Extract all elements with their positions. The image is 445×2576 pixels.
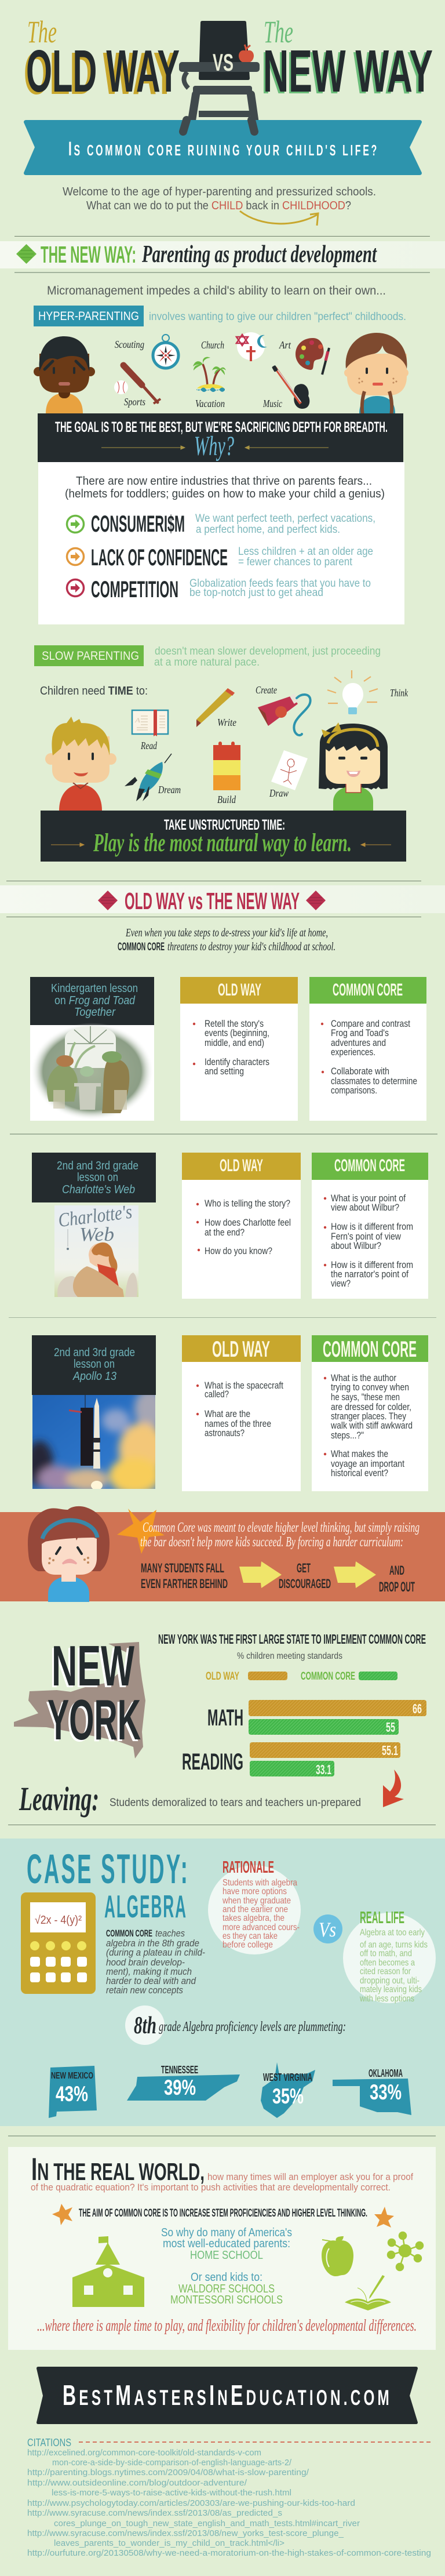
- label: write: Write: [217, 717, 236, 728]
- icon: star left: [52, 2204, 72, 2225]
- illustration: blond boy: [45, 717, 116, 811]
- icon: compass: [153, 335, 178, 368]
- icon: rocket: [125, 754, 172, 801]
- panel: kindergarten lesson: Kindergarten lesson: [51, 982, 138, 995]
- text: even when: COMMON CORE: [118, 941, 165, 953]
- panel: kindergarten lesson: Together: [74, 1006, 116, 1019]
- text: so why: Or send kids to:: [191, 2271, 262, 2284]
- panel: take unstructured time: [41, 811, 406, 862]
- illustration: boy with dark skin: [34, 336, 95, 413]
- step: many students: EVEN FARTHER BEHIND: [141, 1576, 228, 1591]
- panel: common core charlotte's web: Fern's point of view: [331, 1231, 401, 1242]
- icon: apple: [239, 45, 254, 62]
- state: new mexico: [49, 2066, 97, 2118]
- intro text: What can we do to put the CHILD back in CHILDHOOD?: [86, 199, 351, 212]
- panel: common core apollo: historical event?: [331, 1468, 388, 1478]
- text: industries: There are now entire industries that thrive on parents fears...: [76, 475, 372, 488]
- reason: competition: Globalization feeds fears that you have to: [189, 577, 371, 590]
- icon: calculator: √2x - 4(y)²: [35, 1914, 82, 1927]
- callout: real life: Algebra at too early: [360, 1928, 425, 1938]
- citations: [27, 2437, 431, 2558]
- panel: case study algebra: ALGEBRA: [104, 1888, 187, 1924]
- step: get discouraged: GET: [297, 1561, 311, 1575]
- callout: rationale: more advanced cours-: [222, 1923, 300, 1932]
- panel: old way charlotte's web: How does Charlotte feel: [205, 1218, 291, 1228]
- callout: rationale: es they can take: [222, 1931, 278, 1941]
- citations: CITATIONS: [27, 2437, 71, 2448]
- step: drop out: AND: [389, 1563, 404, 1578]
- reading bars: [182, 1742, 400, 1777]
- label: york: YORK: [46, 1690, 138, 1753]
- banner: bestmastersineducation: [37, 2367, 418, 2424]
- icon: paint tube: [258, 693, 311, 735]
- panel: common core kindergarten: adventures and: [331, 1038, 386, 1048]
- panel: old way kindergarten: and setting: [205, 1066, 244, 1077]
- panel: case study algebra: [0, 1839, 445, 2126]
- panel: common core apollo: steps...?": [331, 1430, 364, 1441]
- math bars: 66: [413, 1701, 422, 1716]
- reading bars: 55.1: [382, 1743, 398, 1758]
- text: micromanagement: Micromanagement impedes a child's ability to learn on their own...: [47, 284, 386, 297]
- citations: leaves_parents_to_wonder_is_my_child_on_track.html</li>: [54, 2538, 284, 2548]
- panel: charlotte's web lesson: lesson on: [77, 1171, 118, 1184]
- text: quadratic equation: of the quadratic equation? It's important to push activities that are developmentally correct.: [31, 2182, 391, 2193]
- arrows toward why: [101, 446, 329, 449]
- panel: old way charlotte's web: OLD WAY: [220, 1156, 263, 1175]
- intro text: Welcome to the age of hyper-parenting and pressurized schools.: [63, 186, 376, 198]
- callout: rationale: and the earlier one: [222, 1905, 288, 1914]
- panel: old way apollo: astronauts?: [205, 1428, 245, 1438]
- bar chart: new york results: [158, 1632, 426, 1777]
- state: west virginia: 35%: [272, 2084, 304, 2108]
- icon: school desk chair: [179, 21, 260, 132]
- reading bars: 33.1: [316, 1762, 331, 1777]
- panel: common core kindergarten: Collaborate with: [331, 1066, 389, 1077]
- label: dream: Dream: [158, 784, 181, 795]
- banner: subtitle: [24, 120, 422, 175]
- text: common core teaches: harder to deal with and: [106, 1976, 196, 1986]
- panel: apollo 13 lesson: Apollo 13: [72, 1370, 116, 1383]
- image: book cover: [54, 1201, 138, 1297]
- new york heading with map: [14, 1634, 145, 1758]
- math bars: MATH: [207, 1705, 243, 1731]
- text: common core teaches: [106, 1928, 205, 1996]
- text: leaving: [19, 1780, 361, 1818]
- panel: old way apollo: What are the: [205, 1409, 250, 1419]
- label: new: NEW: [52, 1634, 134, 1698]
- panel: old way kindergarten: Identify characters: [205, 1057, 269, 1067]
- panel: common core apollo: stranger places. They: [331, 1411, 407, 1422]
- reason: consumerism: We want perfect teeth, perfect vacations,: [195, 513, 375, 525]
- panel: old way kindergarten: Retell the story's: [205, 1019, 264, 1029]
- vs label: VS: [213, 49, 234, 76]
- heading: case study: CASE STUDY:: [27, 1847, 189, 1892]
- text: common core teaches: ment), making it much: [106, 1967, 192, 1977]
- state: tennessee: 39%: [164, 2076, 196, 2099]
- panel: old way apollo: called?: [205, 1389, 229, 1400]
- panel: kindergarten lesson: on Frog and Toad: [54, 994, 136, 1007]
- legend: OLD WAY: [206, 1670, 239, 1683]
- panel: old way kindergarten: events (beginning,: [205, 1028, 269, 1038]
- callout: hyper-parenting: HYPER-PARENTING: [38, 310, 139, 323]
- state: new mexico: NEW MEXICO: [51, 2071, 93, 2081]
- callout: real life: dropping out, ulti-: [360, 1976, 420, 1986]
- text: so why: [161, 2226, 292, 2306]
- panel: common core apollo: trying to convey when: [331, 1382, 409, 1393]
- callout: real life: mately leaving kids: [360, 1985, 422, 1994]
- panel: common core apollo: are dressed for colder,: [331, 1402, 411, 1412]
- title: the old way: [24, 14, 180, 107]
- callout: real life: with less options: [359, 1994, 414, 2004]
- reason: lack of confidence: = fewer chances to parent: [238, 556, 353, 568]
- panel: common core charlotte's web: How is it different from: [331, 1222, 413, 1232]
- label: music: Music: [262, 398, 282, 409]
- callout: rationale: have more options: [222, 1887, 287, 1896]
- callout: rationale: [208, 1858, 301, 1954]
- panel: reasons: [38, 462, 404, 624]
- illustration: sad girl: [28, 1506, 110, 1602]
- label: draw: Draw: [269, 787, 289, 799]
- panel: charlotte's web lesson: [32, 1153, 156, 1297]
- panel: common core kindergarten: experiences.: [331, 1047, 375, 1058]
- state: new mexico: 43%: [56, 2082, 88, 2106]
- panel: old way charlotte's web: How do you know?: [205, 1246, 272, 1256]
- panel: old way apollo: What is the spacecraft: [205, 1380, 283, 1391]
- state: west virginia: [261, 2062, 315, 2118]
- label: new: NEW: [50, 1636, 132, 1699]
- callout: hyper-parenting: involves wanting to give our children "perfect" childhoods.: [149, 311, 406, 323]
- citations: http://www.syracuse.com/news/index.ssf/2013/08/new_yorks_test-score_plunge_: [27, 2528, 344, 2538]
- icon: calculator: [21, 1892, 96, 1994]
- label: vacation: Vacation: [195, 398, 225, 409]
- citations: mon-core-a-side-by-side-comparison-of-english-language-arts-2/: [52, 2458, 292, 2468]
- illustration: girl with bow: [319, 722, 388, 811]
- panel: common core kindergarten: Frog and Toad's: [331, 1028, 389, 1038]
- illustration: girl with pigtails: [344, 333, 408, 418]
- bar chart: new york results: % children meeting standards: [237, 1651, 342, 1661]
- panel: common core apollo: What makes the: [331, 1449, 388, 1459]
- panel: common core kindergarten: Compare and contrast: [331, 1019, 410, 1029]
- panel: common core apollo: voyage an important: [331, 1459, 404, 1469]
- icon: star right: [374, 2207, 394, 2228]
- panel: common core apollo: he says, "these men: [331, 1392, 400, 1403]
- panel: harder curriculum: [0, 1506, 445, 1602]
- legend: [206, 1670, 397, 1683]
- panel: old way charlotte's web: [182, 1153, 301, 1299]
- panel: apollo 13 lesson: lesson on: [74, 1358, 115, 1371]
- state: oklahoma: 33%: [370, 2080, 402, 2104]
- panel: old way charlotte's web: Who is telling the story?: [205, 1198, 290, 1209]
- illustration: frog and toad: [30, 1023, 154, 1121]
- step: get discouraged: DISCOURAGED: [279, 1576, 331, 1591]
- citations: http://www.outsideonline.com/blog/outdoor-adventure/: [27, 2478, 247, 2488]
- citations: http://parenting.blogs.nytimes.com/2009/04/08/what-is-slow-parenting/: [27, 2468, 309, 2477]
- state: tennessee: TENNESSEE: [161, 2064, 198, 2076]
- text: common core teaches: retain new concepts: [106, 1985, 183, 1996]
- step: get discouraged: [279, 1561, 331, 1591]
- citations: http://excelined.org/common-core-toolkit/old-standards-v-com: [27, 2448, 261, 2458]
- title: the old way: OLD WAY: [24, 40, 176, 107]
- panel: in the real world: [8, 2147, 436, 2350]
- panel: common core charlotte's web: the narrator's point of: [331, 1269, 408, 1280]
- title: the old way: OLD WAY: [26, 38, 180, 104]
- label: create: Create: [256, 684, 277, 696]
- text: leaving: Students demoralized to tears and teachers un-prepared: [110, 1797, 361, 1809]
- callout: rationale: takes algebra, the: [222, 1913, 284, 1923]
- panel: common core kindergarten: [309, 977, 426, 1121]
- panel: old way kindergarten: [180, 977, 298, 1121]
- text: even when: [118, 927, 335, 953]
- text: industries: [65, 475, 385, 500]
- citations: http://www.psychologytoday.com/articles/200303/are-we-pushing-our-kids-too-hard: [27, 2498, 355, 2508]
- icon: religious symbols: [236, 332, 267, 361]
- panel: goal and why: [38, 413, 403, 462]
- panel: common core kindergarten: classmates to determine: [331, 1076, 417, 1087]
- reason: competition: [67, 577, 371, 602]
- panel: old way apollo: [182, 1335, 301, 1491]
- map: new york state: [14, 1642, 145, 1758]
- label: sports: Sports: [124, 396, 145, 408]
- panel: old way apollo: names of the three: [205, 1419, 271, 1429]
- heading: 8th grade: 8th: [134, 2012, 156, 2039]
- arrow: downward red: [383, 1770, 404, 1807]
- text: even when: threatens to destroy your kid's childhood at school.: [167, 940, 335, 953]
- arrow: child to childhood: [240, 211, 318, 226]
- callout: rationale: Students with algebra: [222, 1878, 297, 1888]
- icon: stick figure drawing: [271, 750, 308, 790]
- image: rocket launch: [32, 1395, 155, 1489]
- heading: 8th grade: grade Algebra proficiency levels are plummeting:: [159, 2019, 346, 2034]
- icon: violin: [272, 365, 309, 409]
- label: scouting: Scouting: [115, 339, 144, 350]
- panel: common core charlotte's web: view?: [331, 1278, 351, 1289]
- callout: real life: off to math, and: [360, 1949, 412, 1959]
- title: the old way: The: [27, 14, 57, 49]
- text: children need time: Children need TIME to:: [40, 685, 148, 697]
- callout: slow parenting: at a more natural pace.: [154, 656, 260, 668]
- text: so why: MONTESSORI SCHOOLS: [170, 2294, 283, 2306]
- panel: old way charlotte's web: at the end?: [205, 1227, 245, 1238]
- label: york: [46, 1688, 141, 1753]
- state: oklahoma: OKLAHOMA: [369, 2068, 403, 2079]
- callout: real life: [343, 1909, 436, 2004]
- citations: less-is-more-5-ways-to-raise-active-kids-without-the-rush.html: [52, 2488, 291, 2498]
- panel: common core charlotte's web: What is your point of: [331, 1193, 406, 1204]
- callout: rationale: before college: [222, 1940, 273, 1950]
- math bars: [207, 1700, 426, 1735]
- callout: real life: REAL LIFE: [360, 1909, 404, 1927]
- step: many students: [141, 1561, 228, 1591]
- icon: schoolhouse: [72, 2236, 144, 2307]
- reason: lack of confidence: LACK OF CONFIDENCE: [91, 545, 228, 571]
- arrows toward text: [51, 843, 391, 846]
- reading bars: READING: [182, 1749, 243, 1775]
- image: book cover: Charlotte's: [57, 1201, 133, 1231]
- panel: common core charlotte's web: How is it different from: [331, 1260, 413, 1270]
- reason: lack of confidence: Less children + at an older age: [238, 546, 373, 558]
- icon: pencil: [196, 688, 235, 727]
- arrow: [239, 1561, 282, 1588]
- panel: common core kindergarten: comparisons.: [331, 1085, 377, 1096]
- text: leaving: Leaving:: [19, 1780, 99, 1818]
- callout: rationale: when they graduate: [222, 1896, 291, 1906]
- callout: slow parenting: SLOW PARENTING: [42, 649, 139, 663]
- reason: consumerism: CONSUMERI$M: [91, 511, 185, 537]
- state: west virginia: WEST VIRGINIA: [263, 2072, 312, 2083]
- heading: in the real world: IN THE REAL WORLD,: [31, 2151, 205, 2187]
- heading: unstructured time: TAKE UNSTRUCTURED TIME:: [164, 817, 285, 833]
- intro text: [63, 186, 376, 226]
- callout: real life: of an age, turns kids: [360, 1940, 428, 1950]
- step: many students: MANY STUDENTS FALL: [141, 1561, 224, 1575]
- icon: building bricks: [213, 742, 240, 790]
- label: think: Think: [390, 687, 408, 699]
- icon: book and pen: [345, 2275, 391, 2310]
- section heading: the new way: THE NEW WAY:: [41, 241, 136, 268]
- panel: apollo 13 lesson: 2nd and 3rd grade: [54, 1346, 135, 1359]
- text: common core teaches: hood brain develop-: [106, 1957, 185, 1968]
- label: build: Build: [217, 794, 236, 805]
- panel: common core apollo: walk with stiff awkward: [330, 1420, 413, 1431]
- callout: hyper-parenting: [34, 306, 406, 326]
- icon: open book: [132, 710, 168, 736]
- icon: molecule: [388, 2232, 423, 2270]
- label: art: Art: [279, 339, 291, 351]
- label: read: Read: [140, 740, 158, 751]
- icon: baseball bat and ball: [114, 364, 161, 404]
- text: so why: most well-educated parents:: [163, 2237, 290, 2250]
- text: quadratic equation: how many times will an employer ask you for a proof: [207, 2171, 413, 2182]
- panel: old way kindergarten: OLD WAY: [218, 980, 261, 1000]
- section heading: the new way: [0, 236, 445, 273]
- title: the new way: [261, 14, 433, 106]
- text: so why: So why do many of America's: [161, 2226, 292, 2239]
- citations: http://ourfuture.org/20130508/why-we-need-a-moratorium-on-the-high-stakes-of-common-core-testing: [27, 2548, 431, 2558]
- state: oklahoma: [333, 2068, 411, 2115]
- callout: real life: often becomes a: [360, 1958, 415, 1968]
- title: the new way: The: [264, 14, 293, 49]
- icon: palette: [296, 338, 329, 375]
- icon: vs circle: [313, 1914, 342, 1943]
- callout: slow parenting: [34, 645, 381, 668]
- panel: common core charlotte's web: [312, 1153, 428, 1299]
- section heading: old way vs new way: OLD WAY vs THE NEW WAY: [125, 888, 300, 914]
- panel: old way kindergarten: middle, and end): [205, 1038, 264, 1048]
- text: common core was meant: [140, 1520, 420, 1550]
- reason: competition: be top-notch just to get ahead: [189, 587, 323, 599]
- reason: consumerism: a perfect home, and perfect kids.: [196, 524, 340, 536]
- callout: rationale: RATIONALE: [222, 1858, 274, 1877]
- text: so why: HOME SCHOOL: [190, 2249, 263, 2262]
- heading: why: Why?: [194, 431, 234, 462]
- text: quadratic equation: [31, 2171, 413, 2193]
- reason: competition: COMPETITION: [91, 577, 178, 602]
- text: so why: WALDORF SCHOOLS: [178, 2283, 275, 2295]
- text: common core teaches: COMMON CORE: [106, 1928, 152, 1939]
- legend: COMMON CORE: [301, 1670, 355, 1683]
- icon: green apple: [322, 2236, 353, 2276]
- arrow: [334, 1561, 376, 1588]
- label: new: [50, 1634, 134, 1699]
- citations: cores_plunge_on_tough_new_state_english_and_math_tests.html#incart_river: [54, 2519, 360, 2528]
- icon: light bulb: [327, 670, 378, 714]
- label: church: Church: [201, 339, 224, 351]
- panel: kindergarten lesson: [30, 977, 154, 1121]
- icon: star: [117, 1509, 165, 1554]
- panel: old way apollo: OLD WAY: [212, 1337, 270, 1362]
- label: york: YORK: [48, 1688, 141, 1752]
- panel: apollo 13 lesson: [25, 1335, 165, 1494]
- activity icons: slow parenting: [125, 670, 408, 805]
- heading: 8th grade: [125, 2005, 346, 2045]
- callout: slow parenting: doesn't mean slower development, just proceeding: [155, 645, 381, 657]
- callout: real life: cited reason for: [360, 1967, 411, 1976]
- math bars: 55: [386, 1720, 395, 1735]
- panel: common core apollo: [312, 1335, 428, 1491]
- image: book cover: Web: [79, 1224, 114, 1245]
- section heading: old way vs new way: [0, 881, 445, 917]
- icon: vs circle: Vs: [319, 1918, 336, 1941]
- activity icons: hyper-parenting: [114, 332, 329, 409]
- step: drop out: [379, 1563, 415, 1595]
- panel: charlotte's web lesson: Charlotte's Web: [62, 1183, 135, 1196]
- panel: common core apollo: What is the author: [331, 1373, 396, 1383]
- icon: palm island: [193, 357, 226, 392]
- panel: common core charlotte's web: about Wilbur?: [331, 1241, 381, 1251]
- text: even when: Even when you take steps to de-stress your kid's life at home,: [125, 927, 328, 939]
- title: [24, 14, 433, 132]
- state: tennessee: [127, 2064, 240, 2101]
- text: common core teaches: (during a plateau in child-: [106, 1948, 205, 1958]
- text: industries: (helmets for toddlers; guides on how to make your child a genius): [65, 488, 385, 500]
- icon: open book: A: [134, 716, 141, 724]
- reason: consumerism: [67, 511, 375, 537]
- panel: charlotte's web lesson: 2nd and 3rd grade: [57, 1160, 138, 1172]
- citations: http://www.syracuse.com/news/index.ssf/2013/08/as_predicted_s: [27, 2508, 282, 2518]
- text: common core teaches: algebra in the 8th grade: [106, 1938, 199, 1949]
- panel: common core charlotte's web: view about Wilbur?: [331, 1202, 399, 1213]
- text: common core teaches: teaches: [155, 1928, 185, 1939]
